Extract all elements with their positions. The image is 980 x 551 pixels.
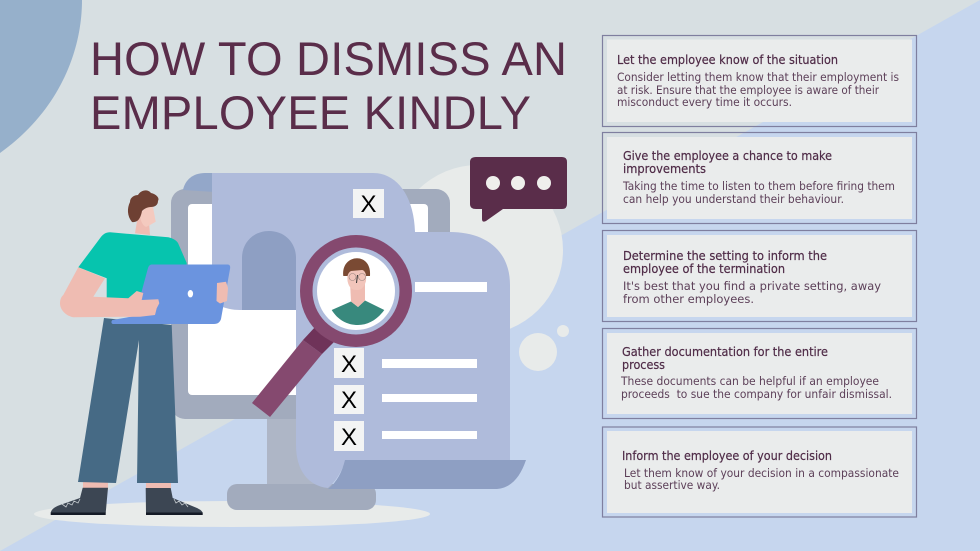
step 4 body: These documents can be helpful if an employee	[620, 374, 879, 388]
illustration: document	[183, 173, 526, 489]
fingers on right	[216, 282, 228, 304]
checkbox: list 1: X	[341, 351, 357, 378]
step 5 body: Let them know of your decision in a compassionate	[624, 466, 899, 480]
illustration: monitor	[171, 189, 450, 510]
title: EMPLOYEE KINDLY	[90, 86, 531, 139]
panel: step 5	[602, 427, 916, 517]
panel: step 3	[602, 230, 916, 322]
step 2 heading: improvements	[623, 162, 706, 176]
title: HOW TO DISMISS AN	[90, 32, 567, 85]
checkbox: top: X	[360, 191, 377, 218]
icon: speech bubble	[470, 157, 567, 222]
step 2 body	[622, 179, 895, 206]
step 1 heading: Let the employee know of the situation	[617, 53, 838, 67]
background: corner blob	[0, 0, 82, 153]
neck and face	[135, 215, 150, 235]
step 5 heading: Inform the employee of your decision	[622, 449, 832, 463]
checkbox: list 1	[334, 348, 364, 378]
step 3 body: It's best that you find a private setting, away	[623, 279, 881, 293]
icon: magnifying glass with portrait	[252, 235, 412, 417]
shirt	[78, 232, 187, 300]
checkbox: list 2: X	[341, 387, 357, 414]
ankles	[83, 482, 171, 490]
arm and hand	[60, 267, 159, 317]
step 3 body: from other employees.	[623, 292, 754, 306]
checkbox: top	[353, 189, 384, 218]
step 3 heading: employee of the termination	[623, 262, 785, 276]
step 4 body	[620, 374, 892, 401]
trousers	[78, 318, 178, 483]
step 4 heading: Gather documentation for the entire	[622, 345, 828, 359]
step 2 body: can help you understand their behaviour.	[623, 192, 844, 206]
step 3 heading	[623, 249, 827, 276]
shoes	[51, 488, 203, 515]
step 2 heading: Give the employee a chance to make	[623, 149, 832, 163]
document text lines	[382, 282, 487, 439]
panel: step 1	[602, 36, 916, 126]
step 3 heading: Determine the setting to inform the	[623, 249, 827, 263]
step 4 heading: process	[622, 358, 665, 372]
step 4 heading	[622, 345, 828, 372]
hair	[128, 190, 159, 222]
title	[90, 32, 567, 139]
panel: step 4	[602, 328, 916, 418]
step 5 body: but assertive way.	[624, 478, 720, 492]
step 5 body	[624, 466, 899, 492]
step 3 body	[623, 279, 881, 306]
ground ellipse	[34, 501, 430, 527]
step 1 body: misconduct every time it occurs.	[617, 95, 792, 109]
step 2 heading	[623, 149, 832, 176]
tablet	[111, 264, 230, 324]
illustration: standing man holding tablet	[51, 190, 230, 515]
step 1 body	[617, 70, 899, 109]
checkbox: list 3	[334, 421, 364, 451]
step 1 body: at risk. Ensure that the employee is aware of their	[617, 83, 879, 97]
step 1 body: Consider letting them know that their employment is	[617, 70, 899, 84]
checkbox: list 3: X	[341, 424, 357, 451]
panel: step 2	[602, 132, 916, 224]
step 2 body: Taking the time to listen to them before firing them	[622, 179, 895, 193]
checkbox: list 2	[334, 385, 364, 414]
step 4 body: proceeds to sue the company for unfair dismissal.	[621, 387, 892, 401]
decorative circles behind document	[393, 165, 569, 371]
